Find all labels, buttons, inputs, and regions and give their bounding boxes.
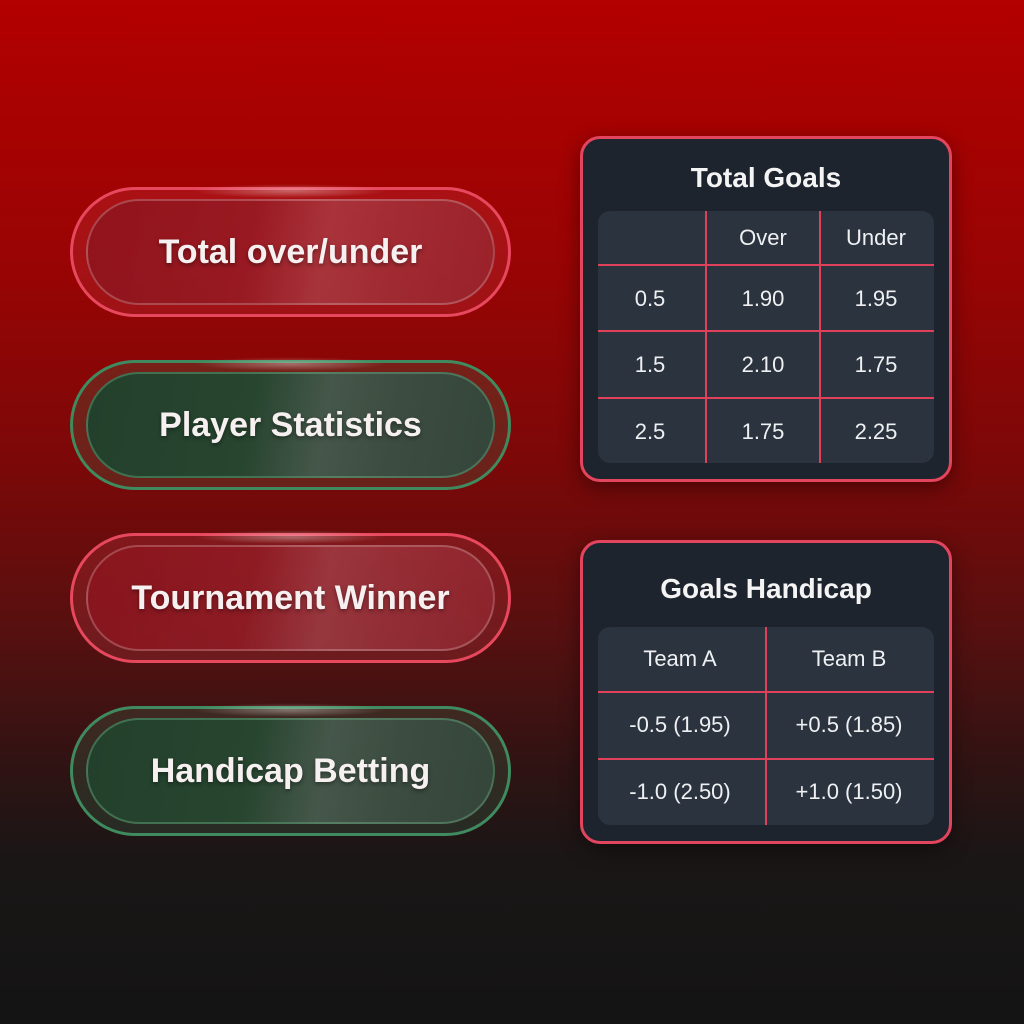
table: total goals odds: 1.75: [742, 419, 784, 444]
pill: Total over/under: Total over/under: [159, 232, 422, 270]
pill: Total over/under: [70, 187, 511, 317]
table: total goals odds: [598, 211, 934, 463]
table: total goals odds: 2.25: [855, 419, 897, 444]
table: total goals odds: 0.5: [635, 286, 665, 311]
table: handicap odds: Team A: [643, 646, 717, 671]
table: total goals odds: Over: [739, 225, 787, 250]
table: total goals odds: 1.5: [635, 352, 665, 377]
table: total goals odds: 1.90: [742, 286, 784, 311]
table: handicap odds: +1.0 (1.50): [795, 779, 903, 804]
pill: Player Statistics: Player Statistics: [159, 406, 422, 444]
heading: Goals Handicap: Goals Handicap: [660, 573, 872, 604]
pill: Tournament Winner: Tournament Winner: [131, 578, 450, 616]
table: total goals odds: Under: [846, 225, 906, 250]
table: total goals odds: 2.10: [742, 352, 784, 377]
table: handicap odds: Team B: [812, 646, 886, 671]
table: handicap odds: [598, 627, 934, 825]
panel: Goals Handicap: [580, 540, 952, 844]
pill: Tournament Winner: [70, 533, 511, 663]
pill: Handicap Betting: [70, 706, 511, 836]
table: total goals odds: 2.5: [635, 419, 665, 444]
table: handicap odds: -1.0 (2.50): [629, 779, 731, 804]
table: total goals odds: 1.75: [855, 352, 897, 377]
table: handicap odds: +0.5 (1.85): [795, 712, 903, 737]
heading: Total Goals: Total Goals: [691, 162, 841, 193]
pill: Handicap Betting: Handicap Betting: [151, 752, 430, 790]
panel: Total Goals: [580, 136, 952, 482]
pill: Player Statistics: [70, 360, 511, 490]
table: total goals odds: 1.95: [855, 286, 897, 311]
table: handicap odds: -0.5 (1.95): [629, 712, 731, 737]
